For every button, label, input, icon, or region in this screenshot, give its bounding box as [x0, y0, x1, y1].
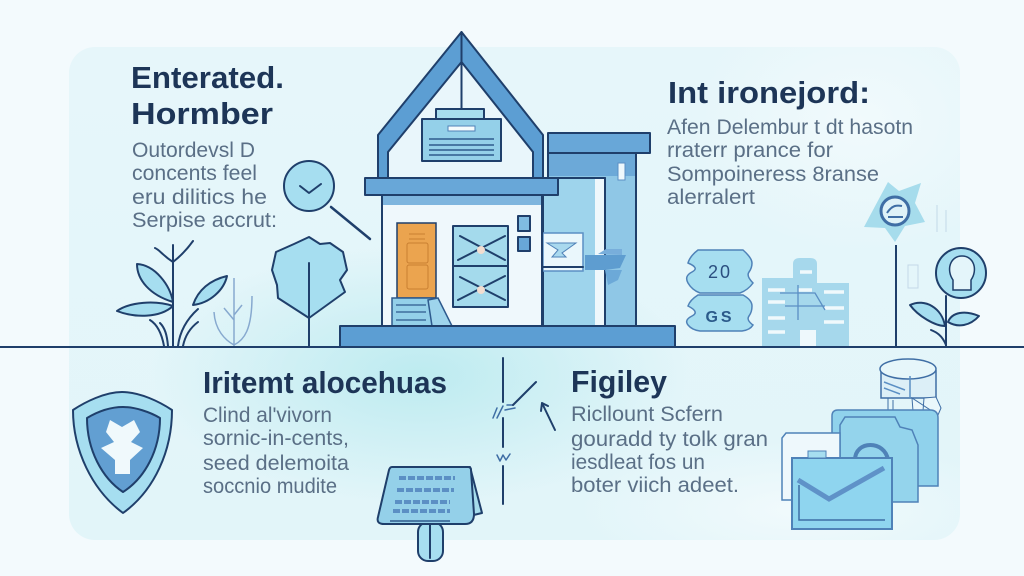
front folder — [792, 458, 892, 529]
body text: soccnio mudite — [203, 474, 337, 498]
small windows — [518, 216, 530, 251]
icon: keyboard sign — [378, 467, 482, 561]
body text: boter viich adeet. — [571, 473, 739, 497]
body text — [667, 115, 913, 209]
text block: top left — [131, 60, 284, 232]
body text: eru dilitics he — [132, 185, 267, 209]
icon: shield-shaped tree — [272, 237, 347, 346]
eave — [365, 178, 558, 195]
arrow: small pointer — [541, 403, 555, 430]
white folder — [782, 433, 840, 500]
ground line — [0, 346, 1024, 348]
panel: background card — [69, 47, 960, 540]
arrow: diagonal line — [513, 382, 536, 405]
window envelopes — [453, 226, 508, 307]
body text: concents feel — [132, 161, 257, 185]
text block: top right — [667, 75, 913, 209]
body text — [571, 402, 768, 497]
body text: rraterr prance for — [667, 138, 833, 162]
envelope fold — [798, 468, 884, 499]
side wing — [524, 133, 650, 326]
body text — [203, 403, 349, 498]
house illustration — [340, 32, 675, 347]
body text: seed delemoita — [203, 451, 349, 475]
body text: Ricllount Scfern — [571, 402, 723, 426]
icon: round badge plant — [910, 248, 986, 346]
icon: shield — [73, 392, 172, 513]
body text — [132, 138, 277, 232]
body text: alerralert — [667, 185, 755, 209]
body text: iesdleat fos un — [571, 450, 705, 474]
body text: gouradd ty tolk gran — [571, 427, 768, 451]
attic unit — [422, 109, 501, 161]
middle folder — [840, 417, 918, 502]
wing laptop — [524, 233, 626, 285]
icon: magnifier — [284, 161, 370, 239]
back folder — [832, 410, 938, 486]
icon: city buildings — [762, 258, 849, 346]
heading: Iritemt alocehuas — [203, 365, 447, 400]
body text: Serpise accrut: — [132, 208, 277, 232]
body text: Sompoineress 8ranse — [667, 162, 879, 186]
icon: cylinder container — [880, 359, 941, 424]
icon: faint sapling — [214, 278, 252, 346]
roof — [378, 32, 543, 178]
heading — [131, 60, 284, 131]
heading: Figiley — [571, 364, 668, 399]
main wall — [382, 195, 542, 326]
badge GS: GS — [705, 309, 735, 326]
heading: Hormber — [131, 96, 273, 131]
badge 20: 20 — [708, 262, 732, 282]
body text: Clind al'vivorn — [203, 403, 332, 427]
icon: folder stack — [782, 410, 938, 529]
body text: sornic-in-cents, — [203, 426, 349, 450]
text block: bottom right — [571, 364, 768, 497]
icon: gear lollipop — [864, 182, 946, 346]
icon: leafy plant — [117, 241, 227, 346]
steps with book — [392, 298, 452, 326]
center divider with arrows — [493, 358, 555, 504]
text block: bottom left — [203, 365, 447, 498]
heading: Int ironejord: — [668, 75, 870, 110]
camera ring — [855, 445, 888, 460]
heading: Enterated. — [131, 60, 284, 95]
body text: Afen Delembur t dt hasotn — [667, 115, 913, 139]
door — [397, 223, 436, 298]
gable — [388, 62, 534, 178]
base slab — [340, 326, 675, 347]
icon: stacked number badges — [687, 250, 753, 331]
body text: Outordevsl D — [132, 138, 255, 162]
